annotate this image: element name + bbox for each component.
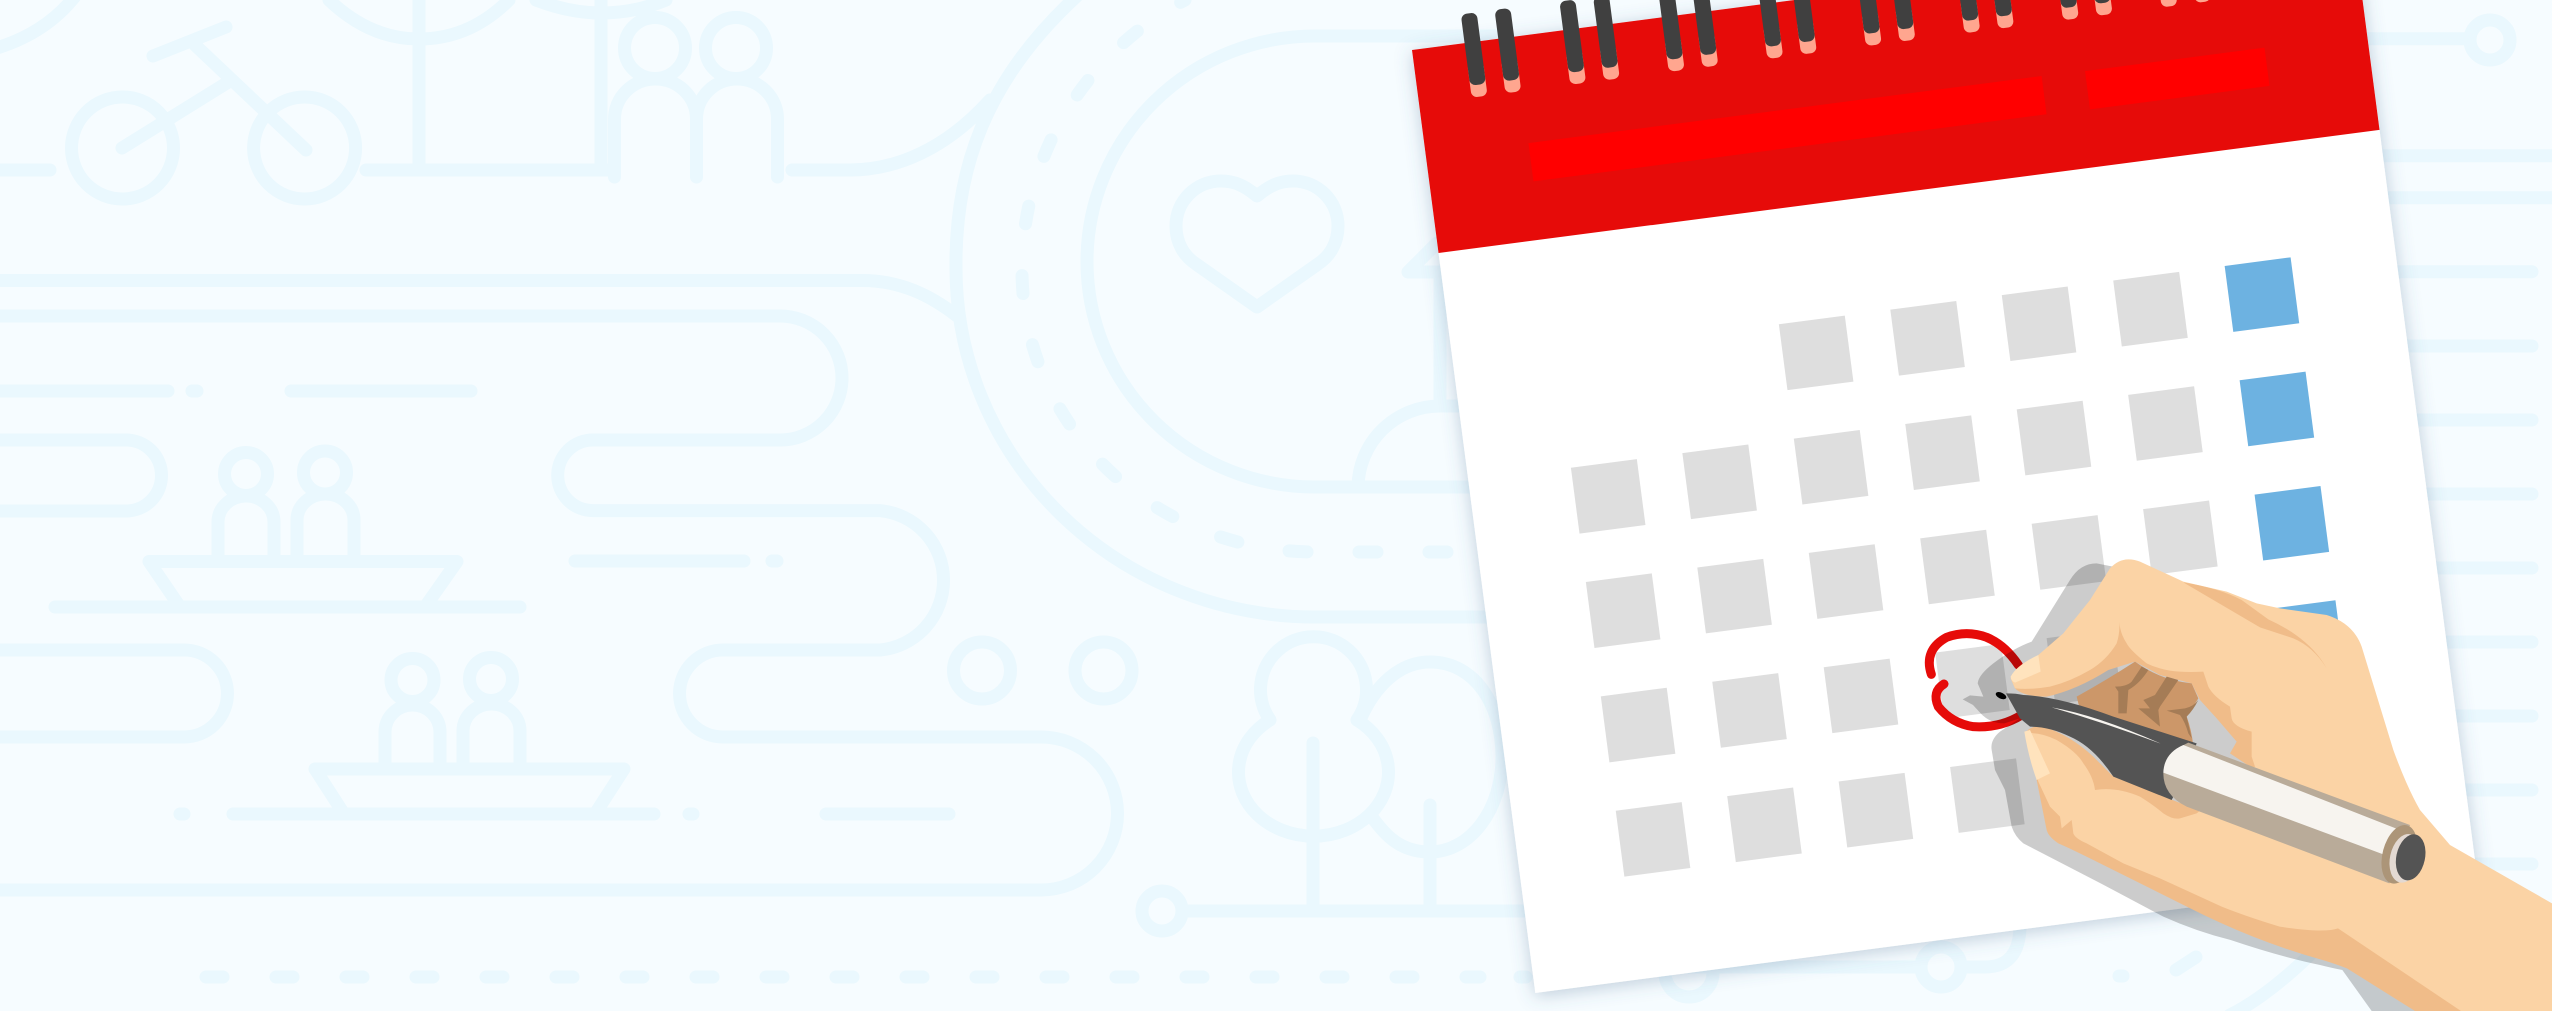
icon: boat with people 1 bbox=[55, 451, 520, 607]
header title bars bbox=[1528, 47, 2269, 182]
node line bottom bbox=[206, 891, 1560, 977]
hand shadow bbox=[1963, 563, 2480, 1011]
icon: bicycle bbox=[72, 27, 356, 199]
date grid bbox=[1556, 272, 2248, 877]
pen highlight bbox=[2052, 707, 2162, 744]
curled fingers bbox=[2077, 662, 2198, 747]
pen cap end bbox=[2392, 832, 2430, 883]
red circle mark bbox=[1929, 634, 2022, 727]
pen tip bbox=[1995, 691, 2007, 701]
knuckle crease bbox=[2183, 582, 2327, 668]
top trees bbox=[0, 0, 666, 170]
fingernails bbox=[2011, 655, 2050, 780]
hand light surface bbox=[2011, 559, 2552, 1011]
weekend blue cells bbox=[2225, 257, 2344, 675]
icon: boat with people 2 bbox=[315, 658, 624, 814]
pen end rim bbox=[2375, 821, 2423, 888]
icon: heart bbox=[1176, 181, 1338, 307]
calendar bbox=[1408, 0, 2476, 993]
pen nib bbox=[2006, 693, 2197, 800]
icon: two people top bbox=[614, 18, 778, 177]
spiral binding rings bbox=[1461, 0, 2211, 98]
road lines bbox=[0, 100, 1118, 890]
decorative rings bbox=[954, 642, 1132, 699]
right side lines bbox=[2300, 20, 2552, 864]
bottom elements under the calendar bbox=[1520, 925, 2320, 1011]
icon: hidden bush and sign bbox=[1358, 243, 1470, 487]
pen barrel bbox=[2163, 743, 2410, 883]
panel: calendar page bbox=[1412, 0, 2476, 993]
pen bbox=[1995, 691, 2430, 888]
panel: red calendar header bbox=[1412, 0, 2380, 253]
hand holding a pen bbox=[1929, 559, 2552, 1011]
big circular road bbox=[956, 0, 1500, 617]
icon: trees bottom bbox=[1238, 637, 1502, 911]
hand shaded base: thumb and arm bbox=[2025, 726, 2552, 1011]
hand shaded base: index side bbox=[2011, 600, 2280, 770]
